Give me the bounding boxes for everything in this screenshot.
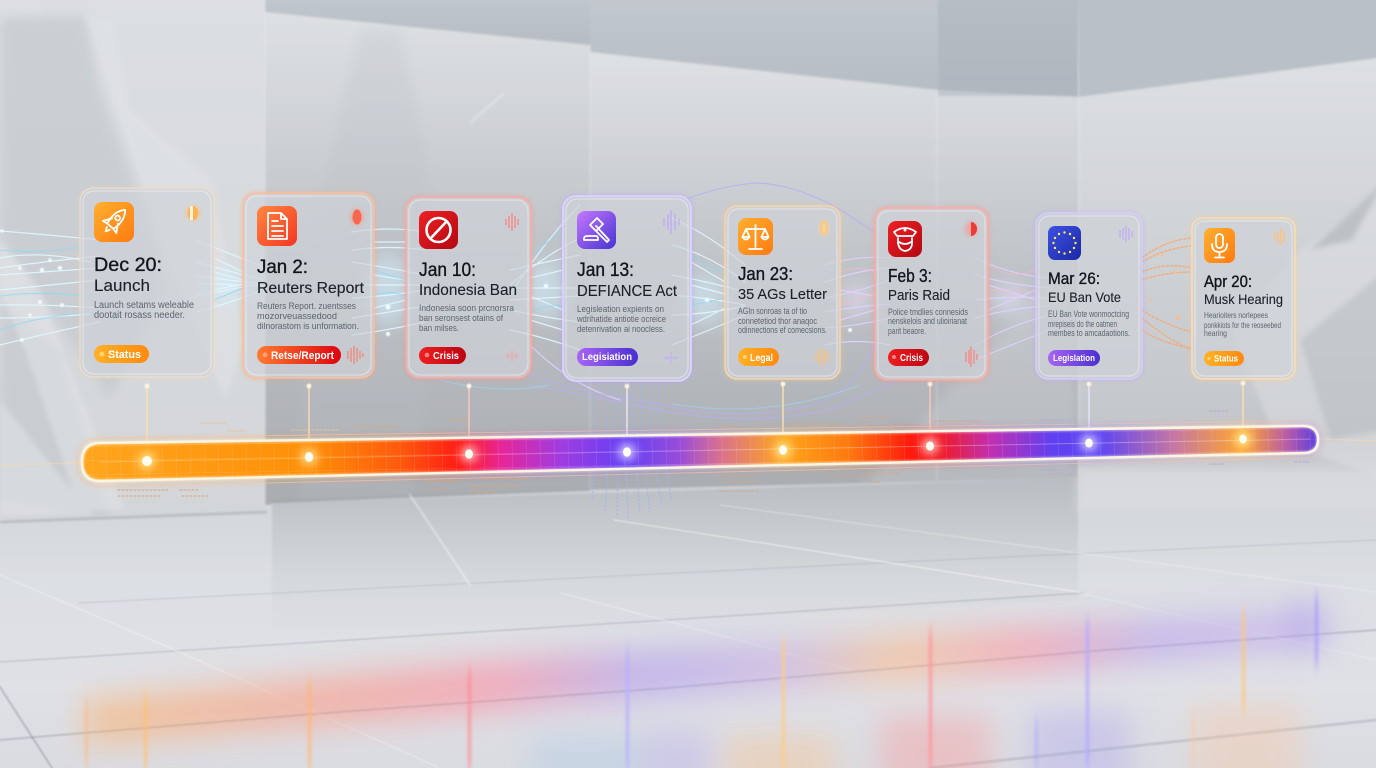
timeline milestone dots	[139, 431, 1251, 469]
icon: police cap	[888, 221, 922, 257]
timeline gradient bar	[0, 421, 1376, 487]
tag: Status	[1204, 351, 1244, 366]
sound wave	[816, 348, 828, 366]
date heading: Feb 3:	[888, 266, 932, 286]
card 6: Feb 3 Paris Raid	[875, 208, 988, 380]
timeline connector stems	[145, 381, 1245, 461]
description: Reuters Report. zuentsses	[257, 301, 356, 312]
floor reflection of the timeline	[85, 595, 1330, 768]
card 1: Dec 20 Launch	[80, 188, 214, 377]
description: AGIn sonroas ta of tio	[738, 306, 807, 316]
description: Launch setams weleable	[94, 300, 194, 311]
event title: Paris Raid	[888, 287, 950, 304]
tag: Status: Status	[108, 349, 141, 361]
sparkle	[663, 352, 679, 364]
description: detenrivation ai noocless.	[577, 324, 665, 335]
description: hearing	[1204, 328, 1227, 338]
description: nenskelois and ulioirianat	[888, 316, 967, 326]
description: dilnorastom is unformation.	[257, 321, 359, 332]
description	[257, 301, 359, 332]
tag: Legislation	[1048, 350, 1100, 366]
floor tile lines	[0, 495, 1376, 768]
tag: report	[257, 346, 341, 364]
description: wdrihatide antiotie ocreice	[576, 314, 666, 325]
tag: Crisis: Crisis	[433, 350, 459, 362]
card 5: Jan 23 35 AGs Letter	[725, 206, 840, 379]
tag: Legal: Legal	[750, 352, 773, 364]
dotted data rain beneath Jan 13	[590, 382, 672, 518]
date heading: Jan 2:	[257, 257, 308, 278]
date heading: Apr 20:	[1204, 273, 1252, 291]
description: odinnections ef comecsions.	[738, 325, 827, 335]
icon: rocket	[94, 202, 134, 242]
description: ponkkiots for the reoseebed	[1204, 320, 1281, 330]
date heading: Mar 26:	[1048, 269, 1100, 288]
card 8: Apr 20 Musk Hearing	[1192, 218, 1295, 379]
icon: prohibited sign	[419, 211, 458, 249]
description	[1048, 309, 1130, 338]
sparkle	[505, 350, 519, 362]
sound wave	[966, 347, 977, 367]
status light	[965, 222, 977, 236]
tag: Legislation: Legisiation	[582, 351, 632, 363]
description: Indonesia soon prcnorsra	[419, 303, 515, 314]
sound wave	[664, 210, 679, 234]
description	[419, 303, 515, 334]
tag: Legislation: Legislation	[1053, 353, 1095, 364]
status light	[819, 220, 829, 236]
event title: Indonesia Ban	[419, 282, 517, 299]
description	[94, 300, 194, 321]
date heading: Jan 13:	[577, 260, 634, 281]
event title: DEFIANCE Act	[577, 283, 678, 300]
description: Hearioiters norlepees	[1204, 310, 1268, 320]
description: ban seronsest otains of	[419, 313, 503, 324]
icon: microphone	[1204, 228, 1235, 263]
date heading: Jan 10:	[419, 260, 476, 281]
tag: Crisis: Crisis	[900, 353, 923, 364]
description: Legisleation expients on	[577, 304, 664, 315]
date heading: Dec 20:	[94, 254, 162, 276]
description: dootait rosass needer.	[94, 310, 185, 321]
description: ban milses.	[419, 323, 459, 334]
status light	[186, 206, 200, 220]
description: EU Ban Vote wonmoctcing	[1048, 309, 1129, 319]
description: connetetiod thor anaqoc	[738, 316, 817, 326]
sound wave	[1275, 229, 1284, 245]
light streaks connecting the cards	[0, 183, 1192, 419]
tag: Legal	[738, 348, 779, 366]
tag: Crisis	[888, 349, 929, 366]
particle dots around the timeline bar	[118, 411, 1310, 496]
sound wave	[348, 346, 363, 364]
description: Police tmdlies connesids	[888, 307, 968, 317]
icon: document	[257, 206, 297, 246]
status light	[351, 209, 363, 225]
description: mozorveuassedood	[257, 311, 337, 322]
icon: EU stars	[1048, 226, 1081, 260]
description: parit beaore.	[888, 326, 926, 336]
event title: Launch	[94, 276, 150, 295]
sound wave	[1120, 226, 1132, 242]
description	[888, 307, 968, 336]
tag: Crisis	[419, 347, 466, 364]
icon: scales of justice	[738, 218, 773, 255]
event title: EU Ban Vote	[1048, 289, 1121, 305]
description: mrepiseis do the oatmen	[1048, 319, 1117, 329]
card 3: Jan 10 Indonesia Ban	[406, 197, 531, 378]
event title: 35 AGs Letter	[738, 286, 827, 303]
description	[738, 306, 827, 335]
sound wave	[506, 213, 518, 231]
description: membes to amcadaotions.	[1048, 328, 1130, 338]
card 7: Mar 26 EU Ban Vote	[1036, 213, 1142, 379]
date heading: Jan 23:	[738, 264, 793, 284]
description	[1204, 310, 1281, 338]
card 2: Jan 2 Reuters Report	[243, 193, 374, 378]
tag: Status: Status	[1214, 354, 1238, 364]
tag: Status	[94, 345, 149, 363]
card 4: Jan 13 DEFIANCE Act	[563, 196, 691, 381]
event title: Reuters Report	[257, 280, 365, 297]
description	[576, 304, 666, 335]
event title: Musk Hearing	[1204, 291, 1283, 307]
icon: gavel	[577, 211, 616, 249]
tag: report: Retse/Report	[271, 350, 334, 362]
tag: Legislation	[577, 348, 638, 366]
